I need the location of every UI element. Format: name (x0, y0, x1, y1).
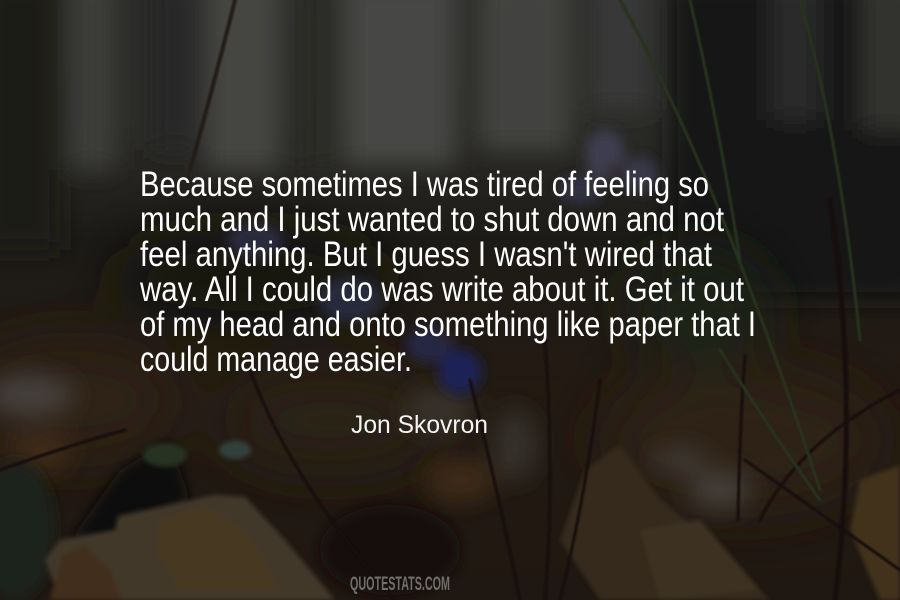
quote line 2: much and I just wanted to shut down and not (140, 200, 724, 239)
quote line 6: could manage easier. (140, 340, 412, 379)
quote line 4: way. All I could do was write about it. Get it out (139, 270, 744, 309)
quote line 3: feel anything. But I guess I wasn't wired that (140, 235, 712, 274)
quote text (139, 165, 756, 379)
watermark: QUOTESTATS.COM (350, 574, 450, 595)
blurred pale patches (0, 375, 752, 510)
dead leaves (45, 441, 900, 600)
author name: Jon Skovron (351, 411, 488, 439)
dark rock and shadow (0, 440, 460, 600)
quote line 5: of my head and onto something like paper that I (140, 305, 756, 344)
quote line 1: Because sometimes I was tired of feeling so (140, 165, 709, 204)
flowers (227, 129, 658, 394)
